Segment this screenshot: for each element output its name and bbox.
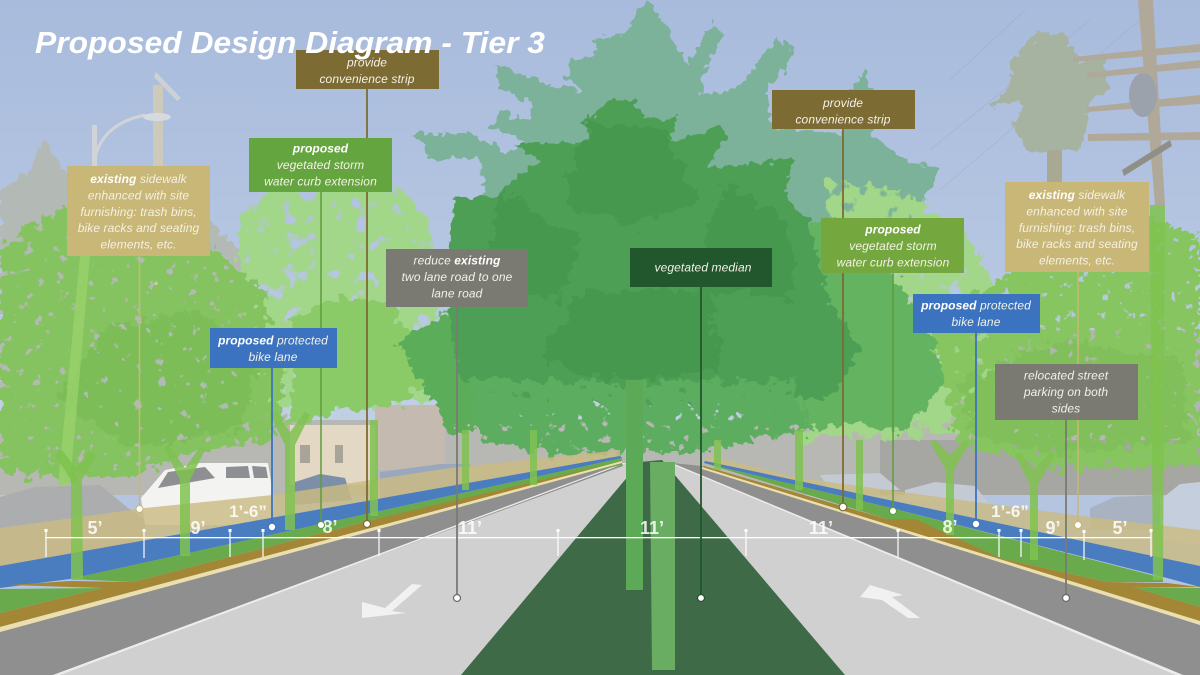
pale tree canopy right [800, 180, 1010, 440]
silver car left [0, 485, 145, 570]
callout: convenience strip left: convenience strip [319, 72, 415, 86]
dimension labels: 9’ [1045, 518, 1061, 538]
callout: curb extension left: proposed [292, 142, 349, 156]
sky background [0, 0, 1200, 470]
callout: bike lane left: proposed protected [217, 334, 328, 348]
callout: existing sidewalk right: furnishing: trash bins, [1019, 221, 1135, 235]
bright tree canopy left [0, 205, 285, 478]
dimension labels: 11’ [640, 518, 664, 538]
title: Proposed Design Diagram - Tier 3 [35, 25, 545, 60]
callout: reduce existing road [386, 249, 528, 602]
callout: curb extension right: water curb extension [837, 256, 950, 270]
callout: existing sidewalk left: existing sidewalk [90, 172, 188, 186]
mid tree canopy left [290, 295, 430, 425]
tan sidewalk right [705, 456, 1200, 566]
callout: existing sidewalk right: enhanced with site [1026, 204, 1128, 218]
callout: existing sidewalk left: furnishing: trash bins, [80, 205, 197, 219]
callout: convenience strip right: convenience strip [795, 112, 891, 126]
brown convenience strip right [702, 466, 1200, 623]
callout: reduce existing road: lane road [432, 286, 483, 300]
callout: relocated street parking [995, 364, 1138, 602]
callout: vegetated median: vegetated median [654, 260, 752, 274]
mid green tree left of center [395, 300, 520, 430]
dimension labels: 1’-6” [229, 502, 267, 521]
dimension labels: 11’ [809, 518, 833, 538]
back central tree canopy [413, 0, 940, 300]
white edge right [669, 463, 1183, 675]
callout: convenience strip right [772, 90, 915, 511]
right street cross-section strips [702, 456, 1200, 625]
house left [290, 405, 445, 485]
callout: existing sidewalk right: bike racks and seating [1016, 237, 1138, 251]
blue bike lane right [704, 461, 1200, 587]
callout: convenience strip left [296, 50, 439, 528]
callout: curb extension right [821, 218, 964, 514]
front central trunk [650, 462, 675, 670]
lower lighter central foliage [470, 380, 810, 455]
white suv [141, 463, 274, 525]
callout: existing sidewalk right: elements, etc. [1039, 254, 1115, 268]
callout: reduce existing road: reduce existing [414, 254, 501, 268]
dimension labels: 5’ [1112, 518, 1128, 538]
light travel lanes [53, 463, 1183, 675]
cream curb right [702, 467, 1200, 625]
parked cars right [1090, 495, 1162, 530]
callout: existing sidewalk right [1005, 182, 1149, 528]
ground band behind cars [0, 420, 1200, 495]
dimension labels: 1’-6” [991, 502, 1029, 521]
dimension labels: 9’ [190, 518, 206, 538]
callout: curb extension left [249, 138, 392, 528]
tan sidewalk left [0, 450, 620, 566]
palm tree right [992, 32, 1108, 190]
front central tree canopy [450, 100, 860, 405]
callout: bike lane left: bike lane [249, 350, 298, 364]
dimension labels: 8’ [942, 517, 958, 537]
callout: bike lane right [913, 294, 1040, 528]
callout: existing sidewalk left: elements, etc. [100, 238, 177, 252]
callout: curb extension right: vegetated storm [849, 239, 937, 253]
callout: convenience strip right: provide [822, 96, 863, 110]
right side tree canopies [760, 180, 1200, 472]
grey trees behind right canopy [950, 330, 1200, 470]
bright tree canopy right [930, 218, 1200, 472]
callout: existing sidewalk left: enhanced with site [88, 188, 189, 202]
green curb extension left [70, 458, 622, 582]
white edge left [53, 463, 626, 675]
callout: bike lane right: bike lane [952, 315, 1001, 329]
right fence [880, 440, 1200, 495]
left side tree canopies [0, 172, 440, 478]
dimension labels: 11’ [458, 518, 482, 538]
dark buffer lane right [672, 463, 1200, 675]
street lamp left [92, 72, 181, 285]
blue bike lane left [0, 456, 622, 588]
callout: relocated street parking: parking on both [1023, 385, 1108, 399]
callout: curb extension left: vegetated storm [277, 158, 364, 172]
darker leaves on right tree [960, 340, 1190, 455]
side tree trunks [55, 205, 1165, 580]
utility pole right [1073, 0, 1200, 205]
mid green tree right [760, 210, 945, 430]
green curb extension right [704, 463, 1163, 582]
callout: bike lane left [210, 328, 337, 531]
distant grey trees left [0, 140, 290, 470]
rear central trunk [626, 380, 643, 590]
far parked cars left [295, 474, 352, 505]
callout: curb extension right: proposed [864, 222, 921, 236]
callout: reduce existing road: two lane road to one [402, 270, 513, 284]
dimension labels: 8’ [322, 517, 338, 537]
cream curb left [0, 461, 622, 632]
pale tree canopy left [240, 172, 440, 410]
road arrow left [362, 584, 422, 618]
callout: existing sidewalk left: bike racks and seating [78, 221, 200, 235]
green corner planter left [0, 588, 102, 613]
callout: bike lane right: proposed protected [920, 298, 1031, 312]
callout: existing sidewalk right: existing sidewalk [1029, 188, 1126, 202]
wires right [930, 10, 1200, 380]
vegetated median [461, 460, 845, 675]
callout: curb extension left: water curb extension [264, 174, 377, 188]
callout: convenience strip left: provide [346, 56, 387, 70]
green corner planter right [1133, 587, 1200, 607]
dimension labels: 5’ [87, 518, 103, 538]
road arrow right [860, 585, 920, 618]
brown convenience strip left [0, 461, 622, 627]
dimension line [44, 529, 1152, 560]
left street cross-section strips [0, 450, 622, 632]
dark buffer lane left [0, 461, 623, 675]
central tree trunks [626, 380, 675, 670]
callout: relocated street parking: relocated street [1024, 368, 1109, 382]
callout: existing sidewalk left [67, 166, 210, 512]
callout: relocated street parking: sides [1052, 402, 1080, 416]
darker leaves in central canopy [480, 120, 790, 385]
callout: vegetated median [630, 248, 772, 602]
darker leaves on left tree [60, 310, 260, 450]
dimension labels [87, 502, 1128, 538]
road surface [0, 461, 1200, 675]
